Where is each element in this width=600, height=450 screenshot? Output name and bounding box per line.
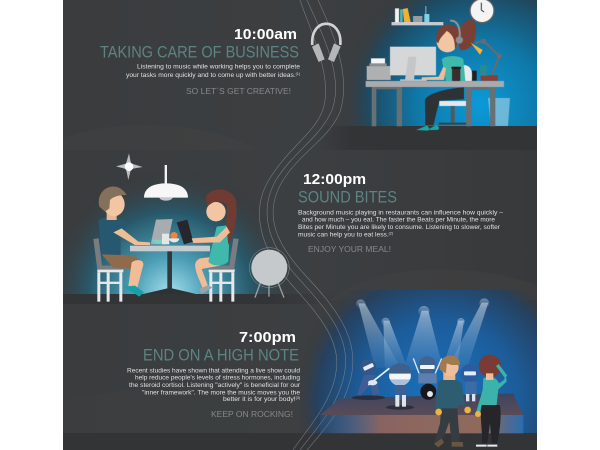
time: 7:00pm [239, 330, 296, 346]
speaker [249, 248, 289, 298]
chair backs [93, 238, 239, 270]
woman [416, 19, 476, 131]
monitor [390, 47, 436, 81]
heading: END ON A HIGH NOTE [143, 346, 299, 364]
icon: headphones [312, 24, 341, 62]
text block: 7:00pm: better it is for your body! [223, 396, 294, 403]
audience woman [475, 355, 507, 447]
text block: 10:00am [100, 27, 300, 96]
time: 10:00am [234, 27, 297, 43]
text block: 12:00pm: music can help you to eat less. [298, 232, 388, 238]
woman [192, 189, 237, 294]
text block: 7:00pm: the steroid cortisol. Listening "actively" is beneficial for our [129, 382, 301, 389]
clock [470, 0, 494, 23]
stools [97, 269, 235, 302]
background panel [63, 0, 537, 450]
man [98, 187, 150, 297]
background hills [63, 125, 537, 433]
body: Recent studies have shown that attending a live show could [127, 368, 300, 374]
scene 3 glow [300, 290, 537, 433]
laptop [151, 219, 173, 244]
text block: 12:00pm: (2) [389, 232, 393, 236]
floor bands [63, 126, 537, 450]
text block: 7:00pm: help reduce people's levels of stress hormones, including [135, 374, 300, 382]
pendant lamp [144, 165, 188, 201]
text block: 12:00pm: and how much – you eat. The faster the Beats per Minute, the more [302, 216, 495, 224]
food bowls [152, 232, 179, 244]
table [130, 246, 210, 294]
tablet [177, 220, 193, 244]
illustration: woman at desk [366, 0, 510, 131]
body: Background music playing in restaurants can influence how quickly – [298, 210, 503, 216]
shelf with books [392, 6, 443, 25]
chair [439, 65, 472, 125]
call to action: SO LET´S GET CREATIVE! [186, 86, 291, 96]
guitarist [357, 359, 389, 396]
body: Listening to music while working helps you to complete [137, 64, 300, 70]
spotlights [356, 298, 489, 370]
time: 12:00pm [303, 172, 366, 188]
text block: 12:00pm: Bites per Minute you are likely to consume. Listening to slower, softer [298, 224, 501, 231]
desk lamp [471, 39, 502, 81]
text block: 10:00am: your tasks more quickly and to come up with better ideas. [126, 72, 294, 79]
sparkle light [116, 153, 143, 180]
text block: 7:00pm: (3) [296, 396, 300, 400]
audience man [434, 355, 471, 447]
drummer and drums [413, 356, 442, 400]
printer [367, 58, 391, 80]
trash bin [488, 98, 510, 126]
text block: 7:00pm: "inner framework". The more the music moves you the [142, 390, 300, 396]
desk [366, 81, 504, 126]
scene 1 glow [340, 0, 537, 126]
illustration: couple at cafe table [93, 153, 289, 302]
text block: 10:00am: (1) [296, 72, 300, 76]
call to action: KEEP ON ROCKING! [211, 409, 293, 419]
illustration: concert stage [320, 298, 523, 447]
heading: TAKING CARE OF BUSINESS [100, 44, 299, 62]
call to action: ENJOY YOUR MEAL! [308, 244, 391, 254]
scene 2 glow [63, 170, 303, 294]
text block: 12:00pm [298, 172, 503, 254]
text block: 7:00pm [127, 330, 301, 419]
singer [389, 363, 412, 407]
bassist [461, 364, 479, 401]
heading: SOUND BITES [298, 188, 397, 206]
sound wave lines [259, 0, 353, 450]
stage [320, 393, 523, 433]
